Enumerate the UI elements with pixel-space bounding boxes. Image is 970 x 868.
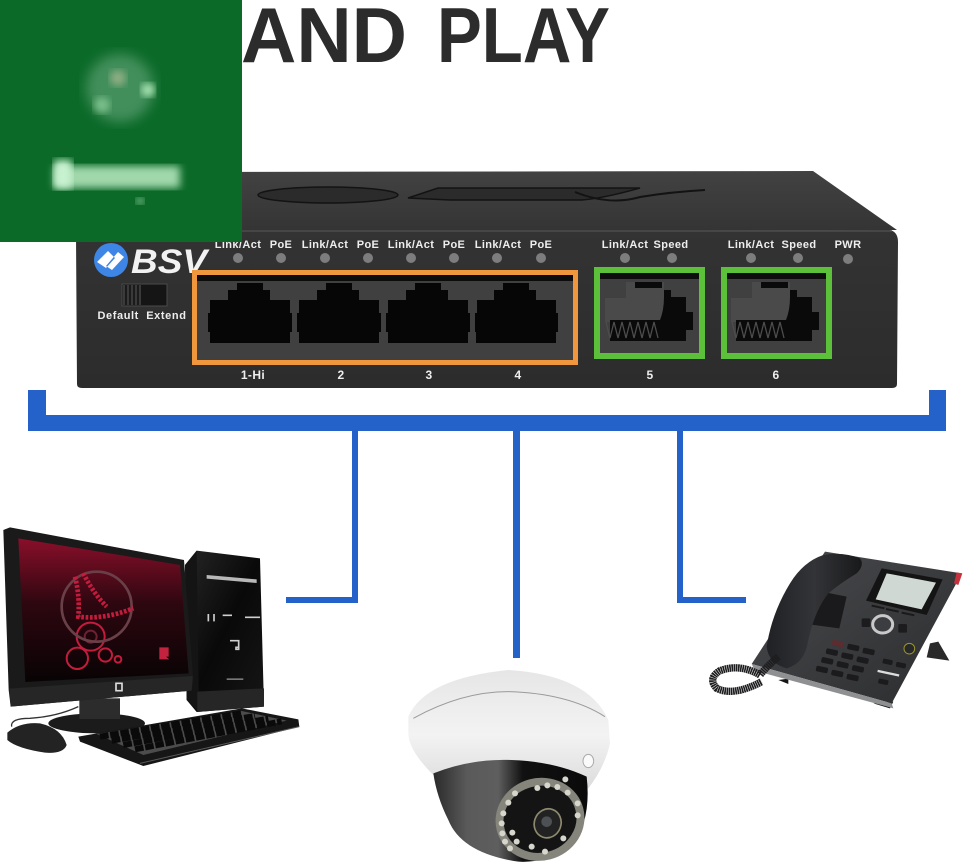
- housing screw recess: [583, 754, 594, 768]
- uplink port 5, green frame: [597, 270, 702, 356]
- blurred round emblem: [86, 54, 155, 122]
- LED labels: Link/Act: [475, 239, 521, 251]
- LED labels: Link/Act: [728, 239, 774, 251]
- phone feet: [778, 679, 893, 708]
- handset: [767, 554, 862, 668]
- network switch: [76, 171, 898, 388]
- mode slide switch: [122, 284, 167, 306]
- switch front face: [76, 230, 898, 388]
- LED labels: PoE: [530, 239, 552, 251]
- title: [241, 0, 610, 79]
- blue connection bracket: [28, 390, 946, 431]
- port 4: [475, 283, 558, 343]
- white camera housing: [408, 670, 610, 788]
- connector line to camera: [513, 431, 520, 658]
- monitor stand: [48, 698, 145, 733]
- monitor: [3, 527, 193, 707]
- black dome: [433, 760, 588, 862]
- LED labels: PoE: [443, 239, 465, 251]
- navigation buttons: [862, 606, 914, 633]
- PoE ports group, orange frame: [194, 272, 576, 362]
- LED labels: Link/Act: [215, 239, 261, 251]
- phone stand: [927, 642, 949, 661]
- computer tower: [185, 551, 264, 712]
- keypad: [816, 639, 906, 685]
- port numbers: 2: [337, 368, 345, 382]
- port numbers: 6: [772, 368, 780, 382]
- green badge overlay: [0, 0, 242, 242]
- phone display: [866, 568, 943, 615]
- LED labels: PoE: [357, 239, 379, 251]
- LED labels: [215, 239, 861, 251]
- keyboard: [78, 708, 299, 766]
- uplink port 6, green frame: [724, 270, 829, 356]
- port 2: [297, 283, 381, 343]
- port numbers: 1-Hi: [241, 368, 265, 382]
- port numbers: 3: [425, 368, 433, 382]
- LED labels: Link/Act: [602, 239, 648, 251]
- phone base: [752, 552, 962, 703]
- LED labels: PoE: [270, 239, 292, 251]
- connector line to computer: [286, 431, 358, 603]
- IR LED ring: [491, 773, 589, 866]
- speaker grille: [809, 590, 847, 628]
- brand logo: [94, 243, 211, 281]
- camera lens: [530, 805, 565, 842]
- port numbers: 4: [514, 368, 522, 382]
- LED labels: PWR: [835, 239, 861, 251]
- icon: desktop computer: [3, 527, 299, 766]
- default extend label: Default Extend: [97, 310, 187, 322]
- port numbers: [241, 368, 780, 382]
- port 3: [386, 283, 470, 343]
- blurred badge wordmark: [54, 160, 180, 204]
- connector line to phone: [677, 431, 746, 603]
- LED labels: Link/Act: [302, 239, 348, 251]
- LED labels: Link/Act: [388, 239, 434, 251]
- mouse: [7, 707, 78, 753]
- status LEDs: [233, 253, 853, 264]
- icon: desk phone: [713, 552, 962, 708]
- switch top surface: [76, 171, 897, 232]
- screen artwork: [62, 572, 133, 669]
- brand logo: BSV: [131, 243, 211, 281]
- port numbers: 5: [646, 368, 654, 382]
- LED labels: Speed: [653, 239, 689, 251]
- icon: dome security camera: [408, 670, 610, 866]
- embossed logo on top: [258, 187, 705, 203]
- port 1: [208, 283, 292, 343]
- LED labels: Speed: [781, 239, 817, 251]
- coiled cord: [713, 657, 778, 691]
- status button: [904, 643, 915, 654]
